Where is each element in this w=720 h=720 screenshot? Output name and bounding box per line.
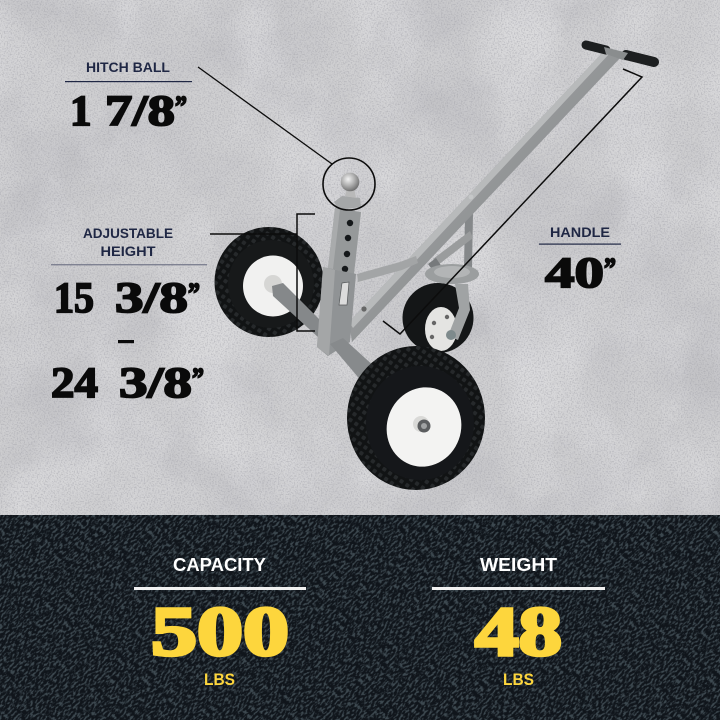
spec: handle [539, 225, 621, 297]
spec: hitch ball [65, 60, 192, 135]
spec: weight: LBS [503, 670, 534, 689]
handle bar [349, 50, 622, 342]
spec: adjustable height: ADJUSTABLE [83, 226, 173, 241]
spec: adjustable height: 15 [54, 275, 94, 322]
spec: handle: HANDLE [550, 225, 610, 240]
height post with holes [328, 208, 361, 274]
left wheel [214, 227, 324, 337]
callout: hitch ball leader and circle [198, 67, 375, 210]
spec: handle: ” [604, 252, 616, 285]
spec: adjustable height: 24 [51, 360, 98, 407]
post sleeve [317, 267, 356, 356]
product photo: trailer dolly [214, 45, 654, 490]
right axle [330, 338, 376, 383]
spec: hitch ball: 7/8 [105, 88, 175, 135]
spec: weight: 48 [475, 594, 562, 671]
callout: height bracket [210, 214, 315, 331]
spec: adjustable height: 3/8 [115, 275, 188, 322]
dark textured footer panel [0, 515, 720, 720]
spec: adjustable height: 3/8 [119, 360, 192, 407]
caster wheel [402, 283, 474, 353]
callout: handle length bracket [383, 69, 642, 334]
spec: capacity: CAPACITY [173, 555, 266, 575]
spec: weight [432, 555, 605, 689]
spec: capacity: 500 [151, 594, 289, 671]
spec: handle: 40 [545, 250, 604, 297]
brace [357, 256, 418, 282]
spec: adjustable height: ” [188, 277, 200, 310]
spec: capacity [134, 555, 306, 689]
handle grips [586, 45, 654, 62]
caster mount and struts [425, 214, 479, 284]
spec: capacity: LBS [204, 670, 235, 689]
left axle [272, 283, 320, 338]
front wheel [347, 346, 485, 490]
spec: adjustable height [51, 226, 207, 407]
spec: hitch ball: 1 [70, 88, 92, 135]
spec: adjustable height: ” [192, 362, 204, 395]
concrete background [0, 0, 720, 516]
hitch ball [334, 173, 361, 210]
spec: hitch ball: ” [175, 90, 187, 123]
spec: adjustable height: HEIGHT [100, 244, 156, 259]
spec: weight: WEIGHT [480, 555, 557, 575]
spec: hitch ball: HITCH BALL [86, 60, 170, 75]
